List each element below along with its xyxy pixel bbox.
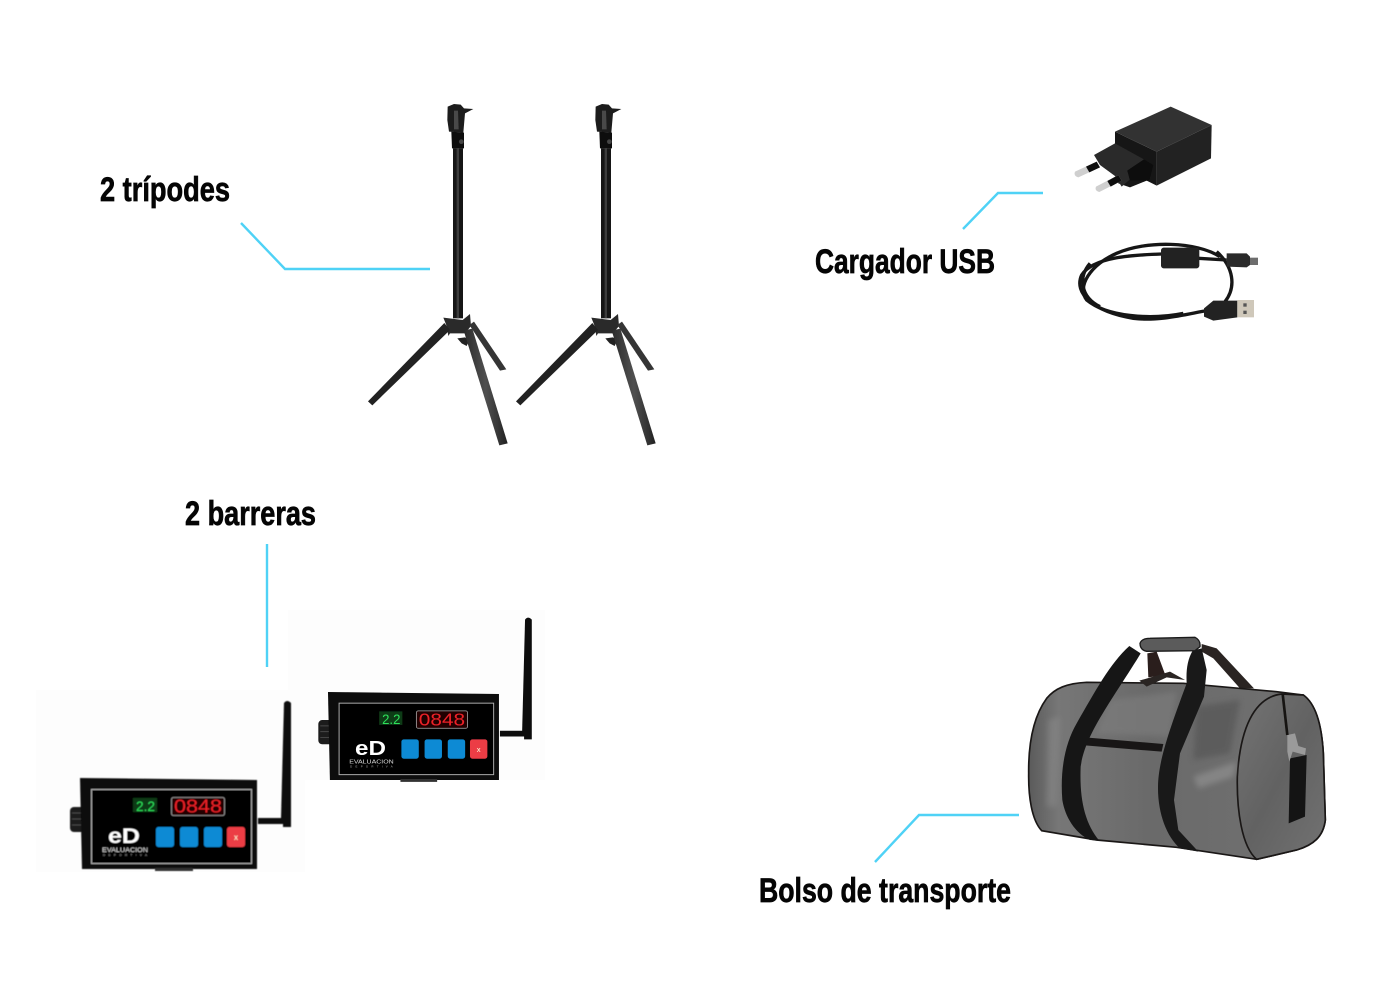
bag body (1029, 682, 1325, 859)
logo (349, 738, 394, 768)
cancel button (470, 739, 487, 759)
logo: EVALUACION (102, 848, 148, 854)
icon: second tripod (516, 104, 656, 445)
icon: USB charger (1075, 107, 1212, 192)
cancel button: x (234, 833, 238, 842)
blue buttons (156, 827, 222, 847)
panel (339, 703, 494, 775)
leader line: bolso (875, 815, 1019, 862)
back handle strap (1147, 652, 1165, 677)
icon: first tripod (368, 104, 508, 445)
top zipper (1139, 672, 1185, 687)
foot (155, 868, 193, 871)
heading: Bolso de transporte: Bolso de transporte (759, 872, 1011, 910)
logo: DEPORTIVA (103, 853, 147, 857)
blue buttons (401, 739, 465, 759)
green display: 2.2 (136, 798, 155, 814)
left strap (1062, 646, 1141, 841)
leader line: trípodes (241, 223, 430, 269)
body (328, 692, 499, 780)
logo (102, 825, 148, 857)
body (80, 778, 257, 869)
bag end panel (1237, 694, 1325, 859)
red display: 0848 (419, 709, 465, 729)
device: barrier front (70, 701, 291, 871)
cancel button: x (477, 745, 481, 754)
foot (400, 779, 437, 782)
antenna (500, 618, 532, 739)
heading: 2 barreras: 2 barreras (185, 495, 316, 533)
pocket zipper (1085, 737, 1163, 752)
panel (92, 790, 252, 864)
device: barrier back (318, 618, 532, 782)
logo: DEPORTIVA (350, 764, 393, 768)
faint photo backgrounds (36, 610, 545, 872)
side strap and clip (1289, 755, 1307, 823)
leader line: barreras (266, 544, 268, 667)
grab handle (1140, 637, 1200, 651)
logo: eD (108, 825, 140, 848)
green display: 2.2 (382, 712, 400, 727)
heading: Cargador USB: Cargador USB (815, 243, 995, 281)
leader line: cargador (963, 193, 1043, 229)
knob (70, 807, 86, 832)
fabric highlights (1193, 762, 1237, 788)
knob (318, 720, 334, 744)
heading: 2 trípodes: 2 trípodes (100, 171, 230, 209)
cancel button (227, 827, 245, 847)
right strap (1158, 648, 1207, 852)
red display: 0848 (174, 796, 222, 816)
icon: USB cable (1080, 244, 1258, 321)
logo: EVALUACION (349, 760, 394, 766)
antenna (258, 701, 291, 827)
icon: duffel bag (1029, 637, 1325, 859)
logo: eD (355, 738, 386, 760)
